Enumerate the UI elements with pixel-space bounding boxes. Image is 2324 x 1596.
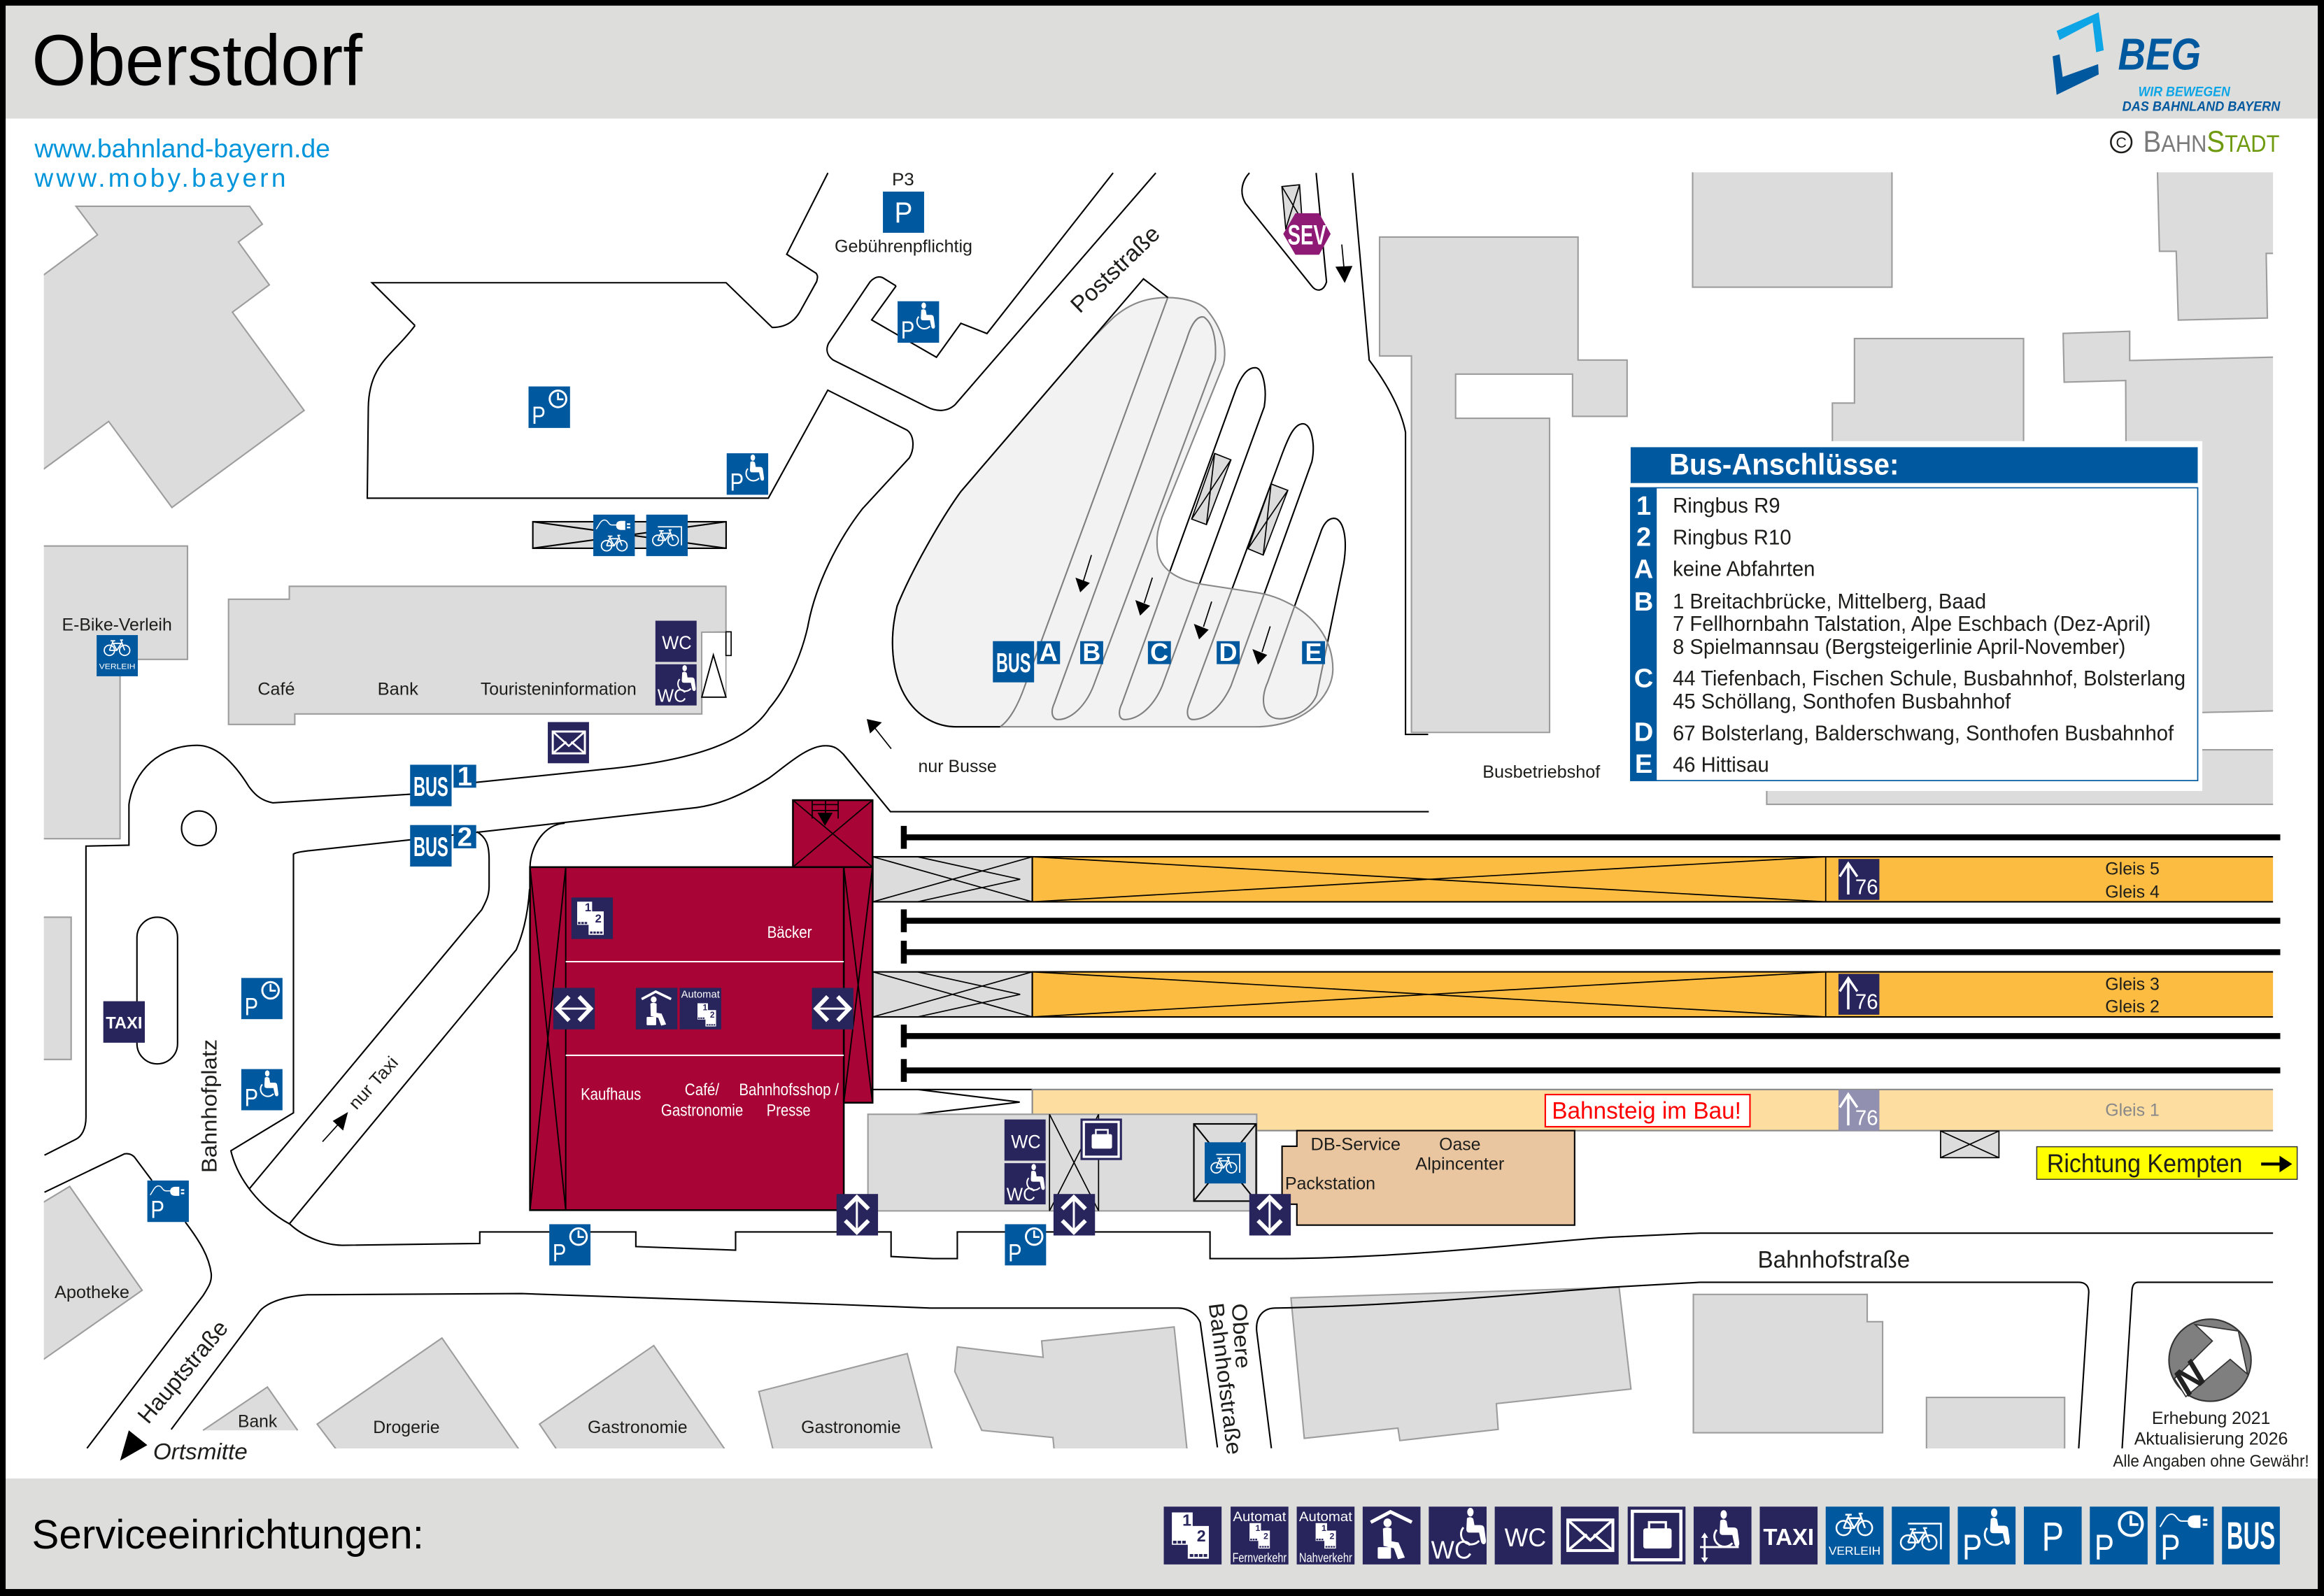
icon: bus station: BUS [996,648,1030,678]
panel: Bus-Anschlüsse: 67 Bolsterlang, Balderschwang, Sonthofen Busbahnhof [1673,722,2174,745]
legend: accessible WC [1429,1506,1487,1565]
bus direction arrows [867,245,1352,749]
icon: ticket counter [572,897,613,939]
legend: ticket machine regional: 2 [1330,1532,1335,1541]
station building: Presse [767,1102,811,1120]
icon: bus station [993,641,1034,683]
survey note [2113,1409,2309,1471]
legend: taxi: TAXI [1763,1525,1814,1551]
icon: bike parking south [1205,1142,1246,1183]
label: nur Taxi with arrow: nur Taxi [345,1053,402,1113]
compass [2164,1319,2251,1404]
street name: Obere Bahnhofstraße: Obere [1227,1302,1256,1369]
icon: P clock south 1 [549,1224,590,1267]
website links: www.bahnland-bayern.de [34,134,330,163]
shops: DB-Service Oase Packstation [1282,1131,1575,1225]
tile: stop 2 [453,822,476,852]
icon: accessible WC south [1005,1163,1046,1205]
icon: post box [548,722,589,763]
legend: P [2024,1506,2082,1565]
legend: WC [1495,1506,1552,1565]
legend: bike hire [1826,1506,1883,1565]
legend: ticket machine long distance: 1 [1255,1523,1260,1533]
footer band [6,1479,2318,1589]
legend: ticket machine long distance [1231,1506,1289,1565]
legend: ticket machine long distance: Automat [1233,1509,1287,1525]
platform: Gleis 2/3 [873,972,2273,1017]
legend: EV charging: P [2160,1527,2180,1567]
platform: Gleis 2/3: Gleis 2 [2105,997,2160,1016]
tile: stop 1 [453,762,476,792]
icon: stairs 2 [1054,1194,1095,1236]
bike shelter bar [533,522,726,548]
shelter: SEV [1282,185,1302,229]
icon: P wheelchair car park [727,453,768,496]
logo: BEG: DAS BAHNLAND BAYERN [2123,99,2281,114]
label: Busbetriebshof: Busbetriebshof [1482,762,1601,782]
icon: EV charging [148,1181,189,1223]
icon: ticket machine: 1 [702,1003,707,1013]
legend: bike parking [1892,1506,1950,1565]
icon: taxi [104,1002,145,1043]
icon: P3 parking [883,192,924,233]
legend: ticket machine long distance: Fernverkehr [1233,1551,1287,1565]
icon: stairs 3 [1249,1194,1291,1236]
icon: ticket counter: 2 [595,912,602,925]
station building: Kaufhaus [581,1085,641,1104]
icon: P clock south 2: P [1008,1239,1022,1267]
icon: bike parking [646,515,688,556]
platform: Gleis 4/5 [873,857,2273,902]
shops: DB-Service Oase Packstation: Alpincenter [1415,1154,1505,1174]
service building south [868,1114,1256,1211]
compass: N [2164,1352,2215,1404]
street name: Obere Bahnhofstraße: Bahnhofstraße [1204,1302,1247,1456]
website links: www.moby.bayern [34,163,285,192]
panel: Bus-Anschlüsse: 8 Spielmannsau (Bergsteigerlinie April-November) [1673,636,2125,659]
legend: ticket machine regional: Automat [1299,1509,1352,1525]
tile: stop 2: 2 [458,822,472,852]
icon: accessible WC: WC [658,686,686,706]
legend: P clock [2090,1506,2148,1567]
survey note: Alle Angaben ohne Gewähr! [2113,1452,2309,1471]
legend: ticket machine regional [1297,1506,1354,1565]
icon: P wheelchair Gebührenpflichtig: P [901,316,914,344]
shelter: platform 1 [1941,1131,1999,1157]
panel: Bus-Anschlüsse: 46 Hittisau [1673,753,1769,776]
legend: bike hire: VERLEIH [1829,1544,1880,1558]
label: Drogerie: Drogerie [373,1418,440,1437]
parking area labels [835,170,972,257]
icon: BUS stop 2 [410,825,452,867]
bay tile E: E [1305,638,1322,667]
label: Apotheke: Apotheke [55,1283,129,1302]
label: nur Busse: nur Busse [918,757,997,776]
station building: Café/ [685,1081,719,1099]
legend: lift access [1694,1506,1752,1565]
footer heading: Serviceeinrichtungen: [32,1512,424,1558]
icon: platform height 76 Gleis 4/5: 76 [1855,875,1878,899]
label: nur Taxi with arrow [323,1053,402,1141]
label: Ortsmitte with arrow: Ortsmitte [153,1439,248,1465]
icon: platform height 76 Gleis 1 [1838,1090,1879,1131]
icon: luggage lockers [1080,1118,1122,1160]
legend: EV charging [2156,1506,2213,1567]
platform: Gleis 4/5: Gleis 5 [2105,860,2160,879]
bike shelter box [1194,1124,1256,1201]
legend: P wheelchair: P [1962,1527,1982,1567]
icon: platform height 76 Gleis 1: 76 [1855,1106,1878,1130]
label: Gastronomie 1: Gastronomie [588,1418,688,1437]
shops: DB-Service Oase Packstation: DB-Service [1310,1134,1401,1154]
platform: Gleis 2/3: Gleis 3 [2105,974,2160,994]
icon: WC: WC [662,632,692,653]
icon: BUS stop 2: BUS [413,832,448,862]
icon: stairs 1 [837,1194,878,1236]
parking area labels: Gebührenpflichtig [835,237,972,257]
icon: passage right [812,988,853,1029]
panel: Bus-Anschlüsse: D [1634,717,1653,747]
surrounding buildings [29,163,2290,1467]
bay tile A: A [1040,638,1058,667]
panel: Bus-Anschlüsse: 1 [1636,491,1651,521]
logo: BEG: WIR BEWEGEN [2139,85,2231,100]
icon: accessible WC south: WC [1007,1185,1035,1205]
legend: post box [1561,1506,1619,1565]
icon: ticket machine: 2 [710,1010,715,1020]
icon: WC south: WC [1011,1130,1041,1152]
legend: accessible WC: WC [1431,1536,1472,1565]
panel: Bus-Anschlüsse: 2 [1636,522,1651,553]
callout: Bahnsteig im Bau: Bahnsteig im Bau! [1552,1098,1741,1125]
bay tile B: B [1082,638,1100,667]
icon: P clock south 1: P [553,1239,566,1267]
sign: Richtung Kempten: Richtung Kempten [2047,1148,2242,1178]
bay tile D: D [1219,638,1237,667]
legend: ticket counter: 1 [1182,1511,1191,1529]
logo: BahnStadt copyright: C [2116,135,2127,151]
panel: Bus-Anschlüsse: 1 Breitachbrücke, Mittelberg, Baad [1673,590,1986,613]
taxi island [137,917,178,1064]
icon: P wheelchair car park: P [730,468,744,496]
icon: taxi: TAXI [106,1015,142,1033]
icon: P wheelchair: P [245,1085,258,1112]
survey note: Erhebung 2021 [2152,1409,2270,1428]
shops: DB-Service Oase Packstation: Packstation [1285,1174,1375,1193]
survey note: Aktualisierung 2026 [2134,1429,2288,1448]
icon: BUS stop 1: BUS [413,772,448,802]
title: Oberstdorf [32,20,362,100]
legend: taxi [1759,1506,1818,1565]
icon: SEV stop [1283,213,1331,255]
icon: passage left [553,988,595,1029]
legend: P: P [2042,1514,2064,1560]
icon: e-bike hire [97,635,138,676]
icon: EV charging: P [150,1195,164,1223]
platform: Gleis 4/5: Gleis 4 [2105,882,2160,902]
icon: P clock [241,978,283,1020]
tile: stop 1: 1 [458,762,472,792]
panel: Bus-Anschlüsse: Bus-Anschlüsse: [1669,448,1899,481]
icon: ticket machine [680,988,721,1029]
legend: BUS: BUS [2227,1515,2275,1558]
label: Gastronomie 2: Gastronomie [801,1418,901,1437]
panel: Bus-Anschlüsse: Ringbus R9 [1673,494,1780,518]
icon: WC [656,621,697,662]
panel: Bus-Anschlüsse: B [1634,587,1653,617]
building: Café Bank Touristeninformation: Touristeninformation [481,679,637,699]
icon: BUS stop 1 [410,764,452,806]
icon: P clock south 2 [1005,1224,1046,1267]
label: Ortsmitte with arrow [120,1430,248,1465]
panel: Bus-Anschlüsse: keine Abfahrten [1673,558,1815,581]
icon: P wheelchair [241,1069,283,1112]
logo: BahnStadt copyright: BAHNSTADT [2144,125,2279,158]
shelter: bay 2 [1248,484,1288,555]
panel: Bus-Anschlüsse: 45 Schöllang, Sonthofen Busbahnhof [1673,690,2011,713]
street name: Poststraße: Poststraße [1065,220,1165,318]
street name: Hauptstraße: Hauptstraße [132,1315,233,1428]
icon: P clock car park: P [532,401,546,429]
panel: Bus-Anschlüsse: 7 Fellhornbahn Talstation, Alpe Eschbach (Dez-April) [1673,613,2151,636]
road outlines [45,173,2273,1448]
legend: ticket counter: 2 [1197,1527,1206,1545]
building: Café Bank Touristeninformation: Bank [378,679,418,699]
icon: WC south [1005,1120,1046,1161]
website links [34,134,330,192]
icon: platform height 76 Gleis 2/3 [1838,974,1879,1015]
logo: BEG [2053,13,2281,114]
legend: ticket machine long distance: 2 [1263,1532,1268,1541]
building: Café Bank Touristeninformation: Café [257,679,295,699]
roundabout [182,811,216,846]
icon: accessible WC [656,664,697,706]
station building: Bahnhofsshop / [739,1081,839,1099]
icon: platform height 76 Gleis 4/5 [1838,859,1879,900]
legend: waiting room [1363,1506,1420,1565]
panel: Bus-Anschlüsse: 44 Tiefenbach, Fischen Schule, Busbahnhof, Bolsterlang [1673,667,2185,690]
icon: ticket machine: Automat [681,990,721,1001]
building: Café Bank Touristeninformation [229,586,731,725]
shaft with crossing [1049,1114,1098,1211]
label: Bank: Bank [238,1412,277,1432]
panel: Bus-Anschlüsse: C [1634,664,1653,694]
panel: Bus-Anschlüsse [1623,441,2202,791]
legend icons [1164,1506,2280,1567]
shops: DB-Service Oase Packstation: Oase [1439,1134,1481,1154]
platform: Gleis 1 under construction: Gleis 1 [2105,1100,2160,1120]
legend: luggage lockers [1628,1506,1685,1565]
icon: e-bike charging [593,515,635,556]
street name: Bahnhofplatz: Bahnhofplatz [197,1039,221,1173]
legend: WC: WC [1505,1523,1546,1552]
panel: Bus-Anschlüsse: A [1634,554,1653,584]
label: E-Bike-Verleih: E-Bike-Verleih [62,615,172,635]
icon: platform height 76 Gleis 2/3: 76 [1855,990,1878,1014]
legend: BUS [2222,1506,2280,1565]
street name: Bahnhofstraße: Bahnhofstraße [1757,1246,1910,1273]
icon: SEV stop: SEV [1288,220,1326,251]
panel: Bus-Anschlüsse: E [1635,749,1652,779]
icon: P clock: P [245,993,258,1020]
tracks [904,826,2281,1082]
bay tile C: C [1150,638,1168,667]
station building [530,800,872,1210]
icon: e-bike hire: VERLEIH [99,662,135,671]
icon: P clock car park [529,387,570,429]
icon: P3 parking: P [895,196,912,229]
panel: Bus-Anschlüsse: Ringbus R10 [1673,526,1792,549]
legend: ticket machine regional: 1 [1322,1523,1326,1533]
legend: P clock: P [2095,1527,2114,1567]
legend: P wheelchair [1957,1506,2015,1567]
station building: Bäcker [767,923,812,942]
station building: Gastronomie [661,1102,743,1120]
platform: Gleis 1 under construction [873,1090,2273,1131]
legend: ticket counter [1164,1506,1221,1565]
shelter: bay 1 [1191,453,1231,525]
legend: ticket machine regional: Nahverkehr [1299,1551,1352,1565]
icon: ticket counter: 1 [585,901,591,914]
logo: BEG: BEG [2118,30,2201,80]
icon: P wheelchair Gebührenpflichtig [898,301,939,344]
icon: waiting room [636,988,677,1029]
bus station bays [893,279,1345,727]
header band [6,6,2318,119]
parking area labels: P3 [892,170,914,190]
